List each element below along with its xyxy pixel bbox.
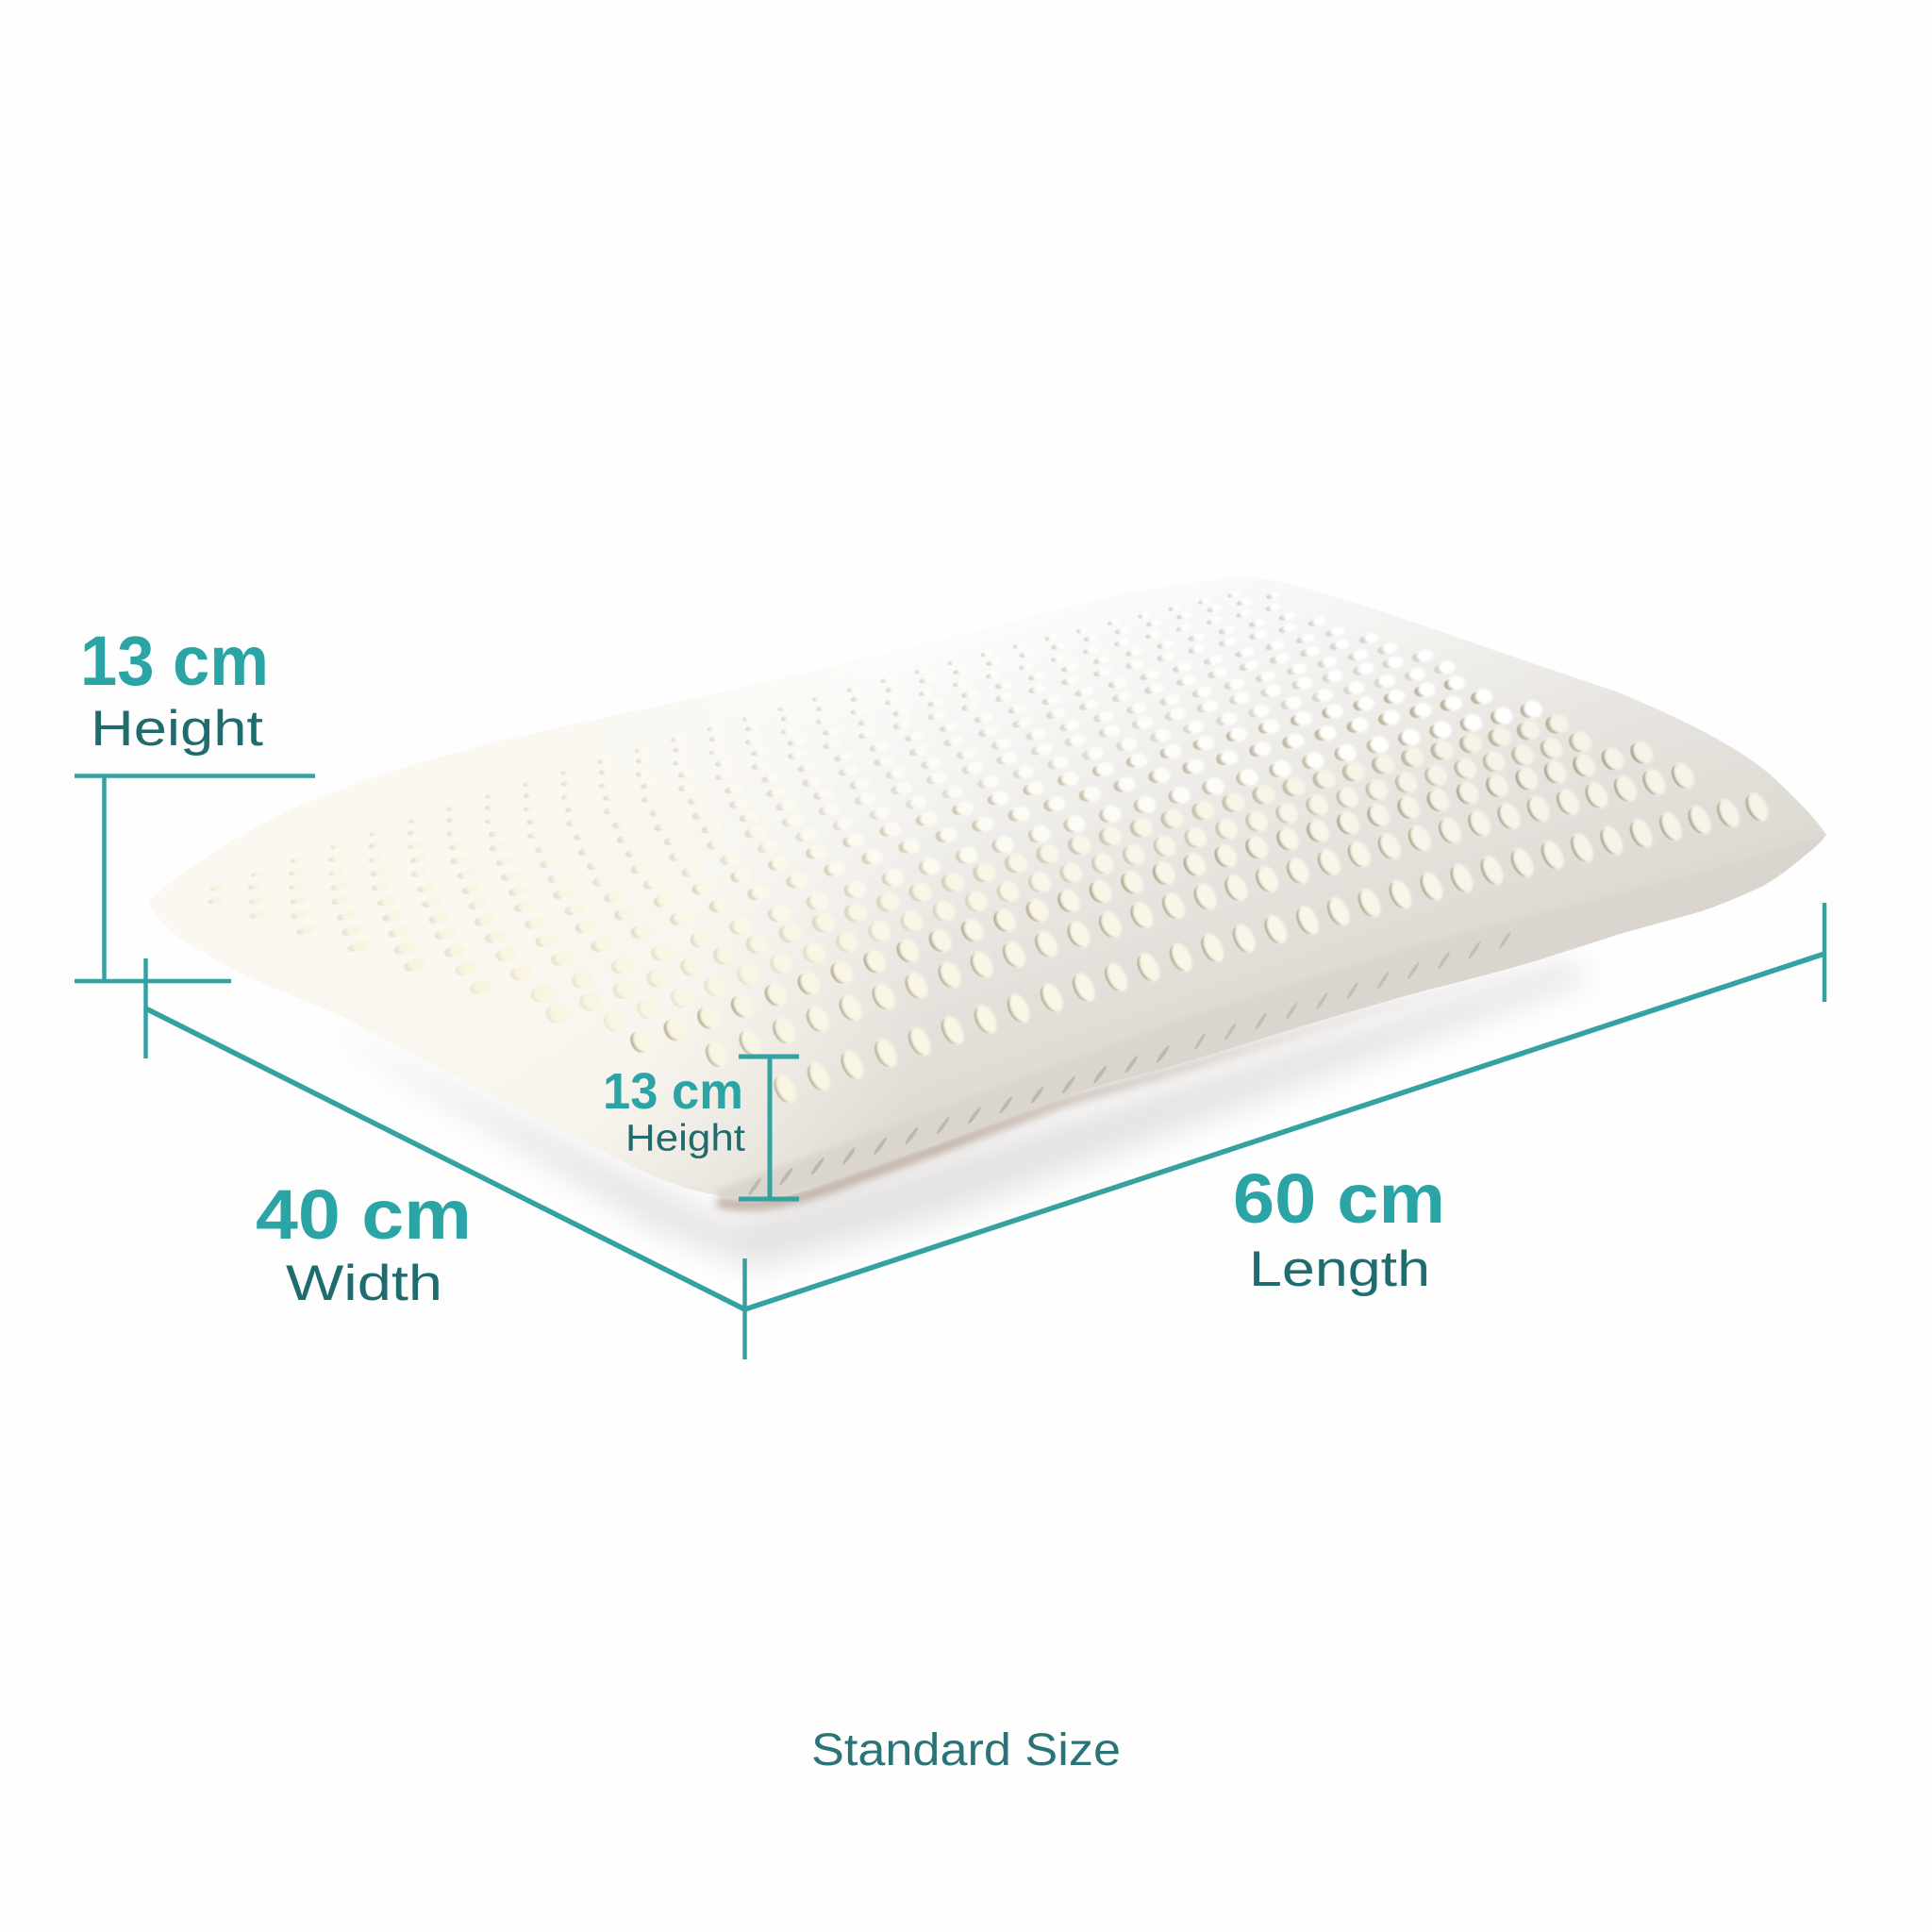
label: 60 cm length: Length	[1249, 1241, 1430, 1297]
label: 40 cm width: 40 cm	[256, 1175, 472, 1254]
pillow	[142, 566, 1840, 1217]
pillow body	[142, 566, 1840, 1217]
caption: standard size: Standard Size	[811, 1725, 1121, 1775]
label: 13 cm height at corner: 13 cm	[603, 1063, 743, 1120]
dimension: corner height bracket	[739, 1057, 799, 1199]
label: 13 cm height top left: 13 cm	[80, 622, 269, 700]
label: 60 cm length	[1233, 1159, 1445, 1297]
label: 13 cm height at corner: Height	[625, 1117, 745, 1158]
label: 13 cm height top left	[80, 622, 269, 757]
perforation dots on top face	[187, 573, 1782, 1090]
pillow shadow on the surface	[321, 962, 1594, 1269]
label: 40 cm width	[256, 1175, 472, 1311]
label: 60 cm length: 60 cm	[1233, 1159, 1445, 1238]
dimension: length line	[745, 903, 1824, 1309]
dot highlights	[191, 573, 1782, 1089]
dimension: width line	[145, 958, 745, 1359]
label: 13 cm height at corner	[603, 1063, 745, 1158]
label: 13 cm height top left: Height	[91, 701, 263, 757]
pillow side band	[717, 835, 1826, 1217]
label: 40 cm width: Width	[286, 1256, 442, 1311]
dimension: overall height bracket	[75, 775, 315, 981]
side band hatch marks	[755, 931, 1532, 1187]
dot shadows	[187, 575, 1779, 1090]
